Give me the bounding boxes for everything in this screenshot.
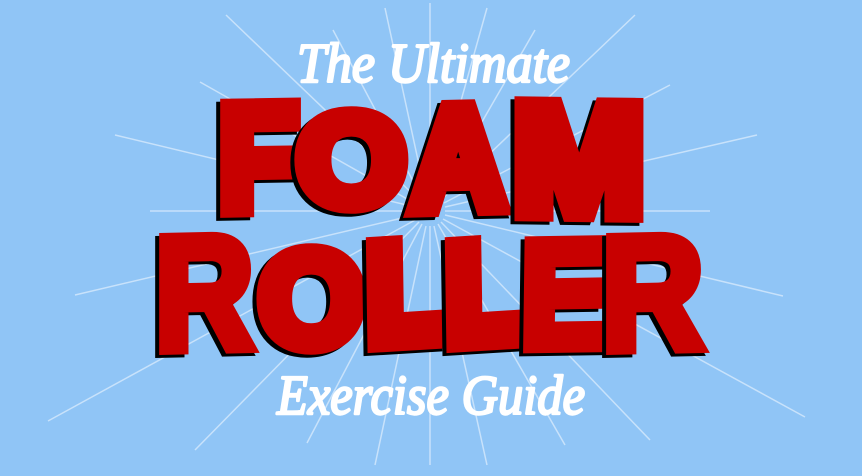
title word: FOAM	[219, 73, 645, 247]
letter M: M	[513, 73, 645, 247]
letter L: L	[368, 217, 440, 370]
letter F: F	[219, 76, 298, 241]
letter E: E	[521, 211, 609, 378]
letter R: R	[155, 202, 254, 384]
letter O: O	[297, 87, 406, 233]
letter A: A	[411, 77, 505, 240]
letter L: L	[447, 217, 518, 370]
title word: ROLLER	[155, 202, 704, 385]
subtitle: Exercise Guide: Exercise Guide	[276, 365, 585, 427]
letter R: R	[602, 203, 704, 385]
subtitle: The Ultimate: The Ultimate	[297, 33, 570, 95]
letter O: O	[259, 223, 364, 374]
